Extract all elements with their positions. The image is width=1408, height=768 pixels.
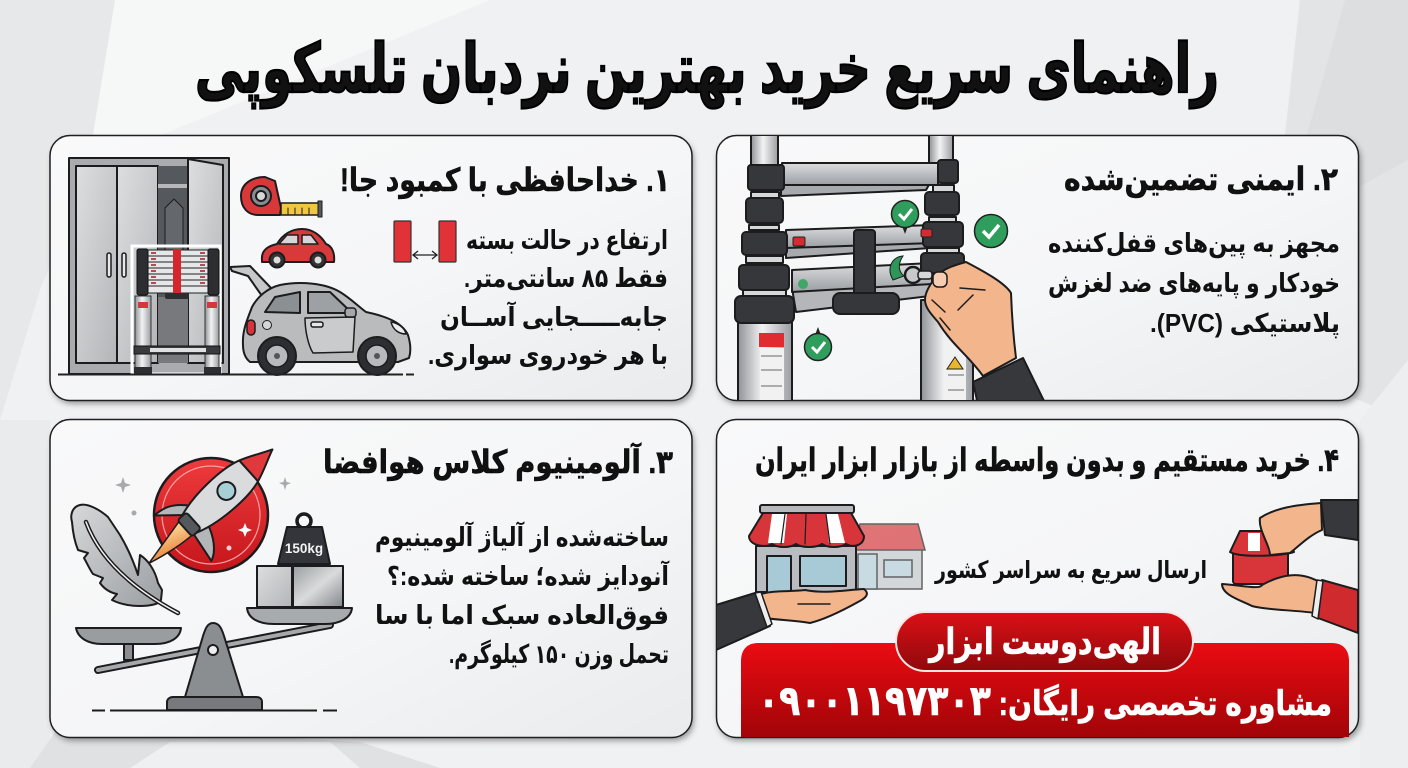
text block 3: تحمل وزن ۱۵۰ کیلوگرم. <box>449 639 669 670</box>
text block 2 <box>1048 228 1340 338</box>
text block 1: با هر خودروی سواری. <box>428 340 668 371</box>
icon: green check badges <box>804 200 1008 360</box>
icon: red circle with rocket <box>128 427 301 593</box>
text block 1: ارتفاع در حالت بسته <box>466 225 668 255</box>
text: nationwide shipping: ارسال سریع به سراسر کشور <box>934 557 1207 584</box>
text block 3: ساخته‌شده از آلیاژ آلومینیوم <box>375 521 669 553</box>
icon: compact width bars <box>394 221 456 262</box>
panel: 3 aerospace aluminium <box>50 420 694 741</box>
icon: balance scale <box>76 514 352 710</box>
text block 2: پلاستیکی (PVC). <box>1150 308 1340 338</box>
icon: feather <box>71 505 178 613</box>
heading 3: ۳. آلومینیوم کلاس هوافضا <box>323 442 673 481</box>
heading 2: ۲. ایمنی تضمین‌شده <box>1064 161 1338 198</box>
text block 3: فوق‌العاده سبک اما با سا <box>375 600 669 631</box>
panel: 1 no more space shortage <box>50 136 694 404</box>
icon: tape measure <box>241 177 322 217</box>
text block 1: فقط ۸۵ سانتی‌متر. <box>464 263 668 294</box>
icon: folded telescopic ladder <box>132 246 221 374</box>
panel: 2 guaranteed safety <box>716 135 1361 405</box>
text block 3: آنودایز شده؛ ساخته شده:؟ <box>387 560 670 592</box>
banner: free consultation phone <box>741 643 1349 737</box>
text block 1 <box>428 225 668 371</box>
icon: hand holding shop <box>716 589 867 650</box>
text block 2: مجهز به پین‌های قفل‌کننده <box>1048 228 1340 259</box>
panel: 4 direct purchase <box>716 420 1361 741</box>
icon: hands giving package <box>1222 500 1358 633</box>
text block 1: جابه‌ـــــجایی آســان <box>440 301 668 332</box>
label: weight 150kg: 150kg <box>285 541 323 556</box>
illustration: ladder lock with hand <box>735 135 1046 405</box>
icon: front shop <box>749 505 864 593</box>
icon: hand <box>925 262 1046 405</box>
heading 1: ۱. خداحافظی با کمبود جا! <box>340 162 670 199</box>
icon: silver car with open trunk <box>230 266 410 375</box>
icon: sparkles <box>115 477 291 516</box>
icon: small red car <box>262 229 334 268</box>
text block 2: خودکار و پایه‌های ضد لغزش <box>1048 268 1340 299</box>
badge: brand name pill <box>896 612 1193 671</box>
icon: back shop <box>854 524 925 589</box>
text block 3 <box>375 521 670 670</box>
text: brand: الهی‌دوست ابزار <box>927 621 1161 663</box>
text: phone number: مشاوره تخصصی رایگان: ۰۹۰۰۱۱۹۷۳۰۳ <box>758 677 1332 724</box>
icon: wardrobe <box>69 158 229 374</box>
